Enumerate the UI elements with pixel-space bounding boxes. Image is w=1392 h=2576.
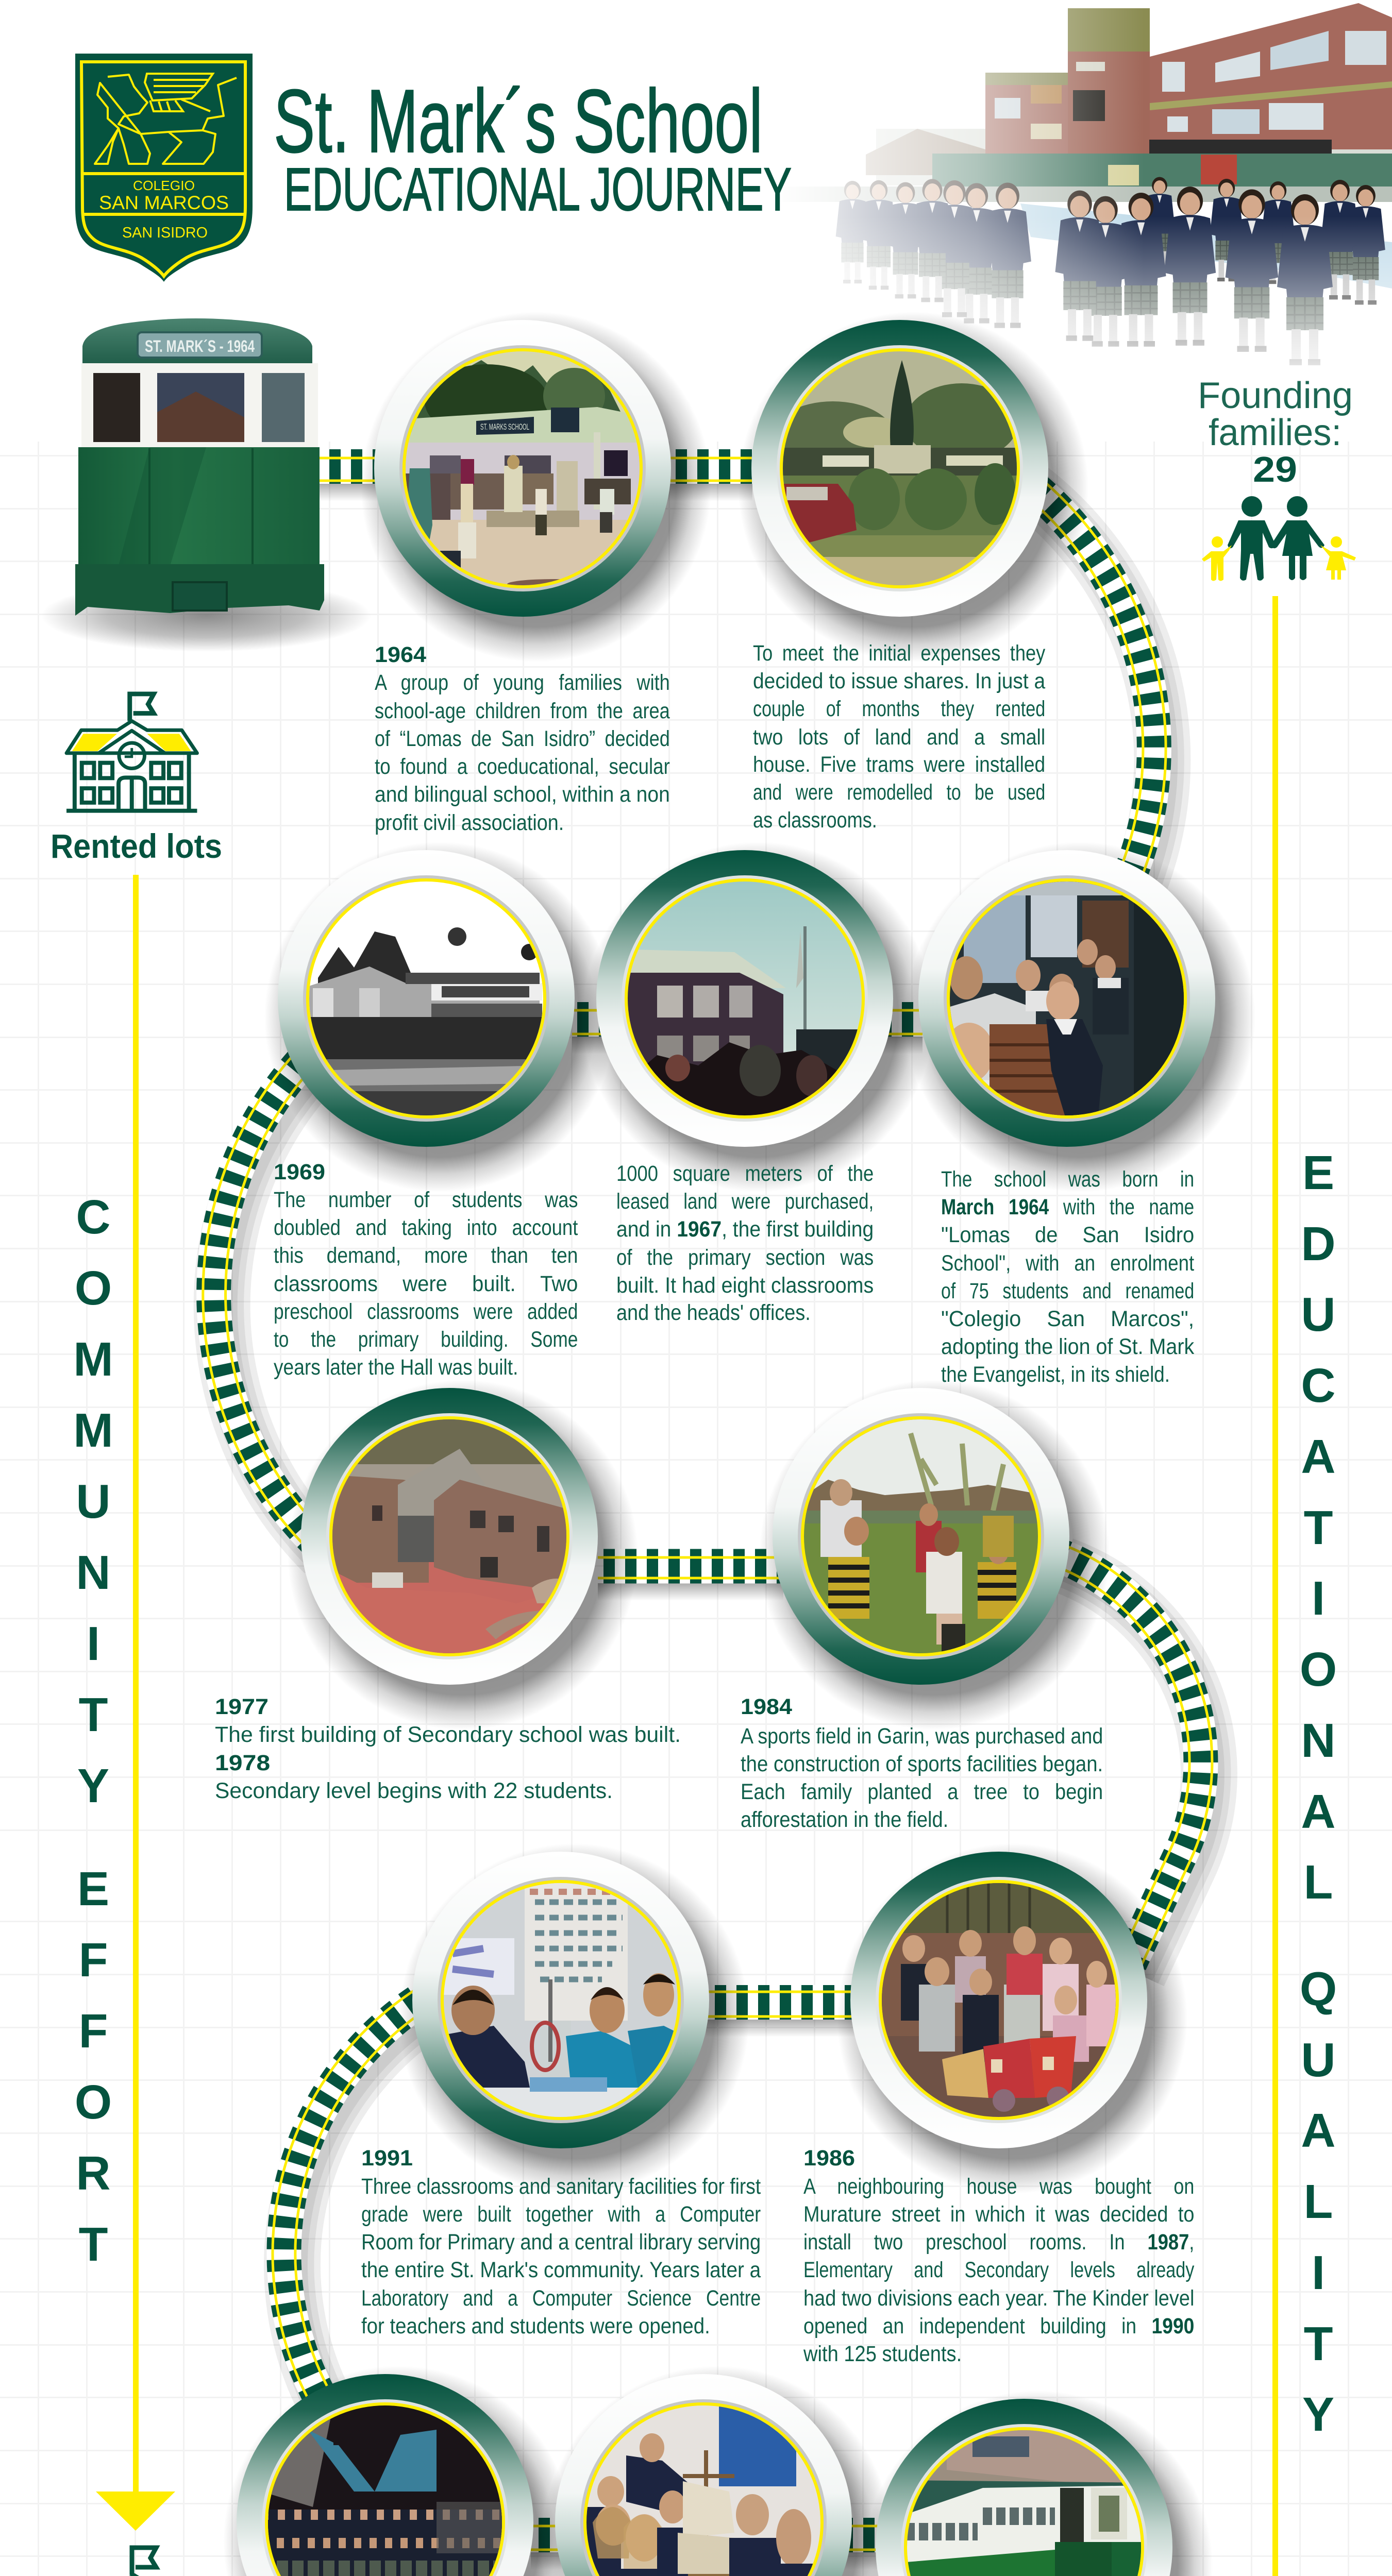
text: 1964: of “Lomas de San Isidro” decided [375, 726, 670, 751]
title: EDUCATIONAL JOURNEY [284, 156, 792, 224]
text: 1984: the construction of sports facilities began. [741, 1752, 1103, 1776]
text: 1969: to the primary building. Some [274, 1327, 578, 1352]
text: 1984 [741, 1694, 1103, 1832]
milestone circle: 1977 [288, 1380, 638, 1730]
vertical heading: community effort: O [75, 1261, 112, 1315]
text: March 1964: of 75 students and renamed [941, 1279, 1194, 1303]
milestone circle: March 1964 [905, 842, 1255, 1192]
text: 1964: and bilingual school, within a non [375, 782, 670, 807]
wing [145, 74, 213, 111]
vertical heading: community effort: T [79, 2217, 108, 2271]
vertical heading: educational quality: U [1301, 1287, 1336, 1341]
vertical heading: community effort: Y [77, 1759, 109, 1812]
text: 1977 and 1978: The first building of Secondary school was built. [215, 1722, 681, 1747]
text: 1991: 1991 [361, 2146, 413, 2171]
milestone circle: rented lots and trams [738, 312, 1088, 662]
logo: San Marcos shield: SAN ISIDRO [122, 225, 208, 241]
vertical heading: educational quality: A [1301, 2104, 1336, 2157]
text: 1969: years later the Hall was built. [274, 1355, 518, 1380]
text: 1984: Each family planted a tree to begin [741, 1780, 1103, 1804]
milestone circle: 1964: ST. MARKS SCHOOL [480, 422, 529, 432]
milestone circle: 1991 [399, 1843, 749, 2194]
text: 1969 [274, 1160, 578, 1380]
text: 1984: A sports field in Garin, was purchased and [741, 1724, 1103, 1749]
railway tracks [0, 442, 1212, 2576]
label: rented lots: Rented lots [51, 827, 222, 865]
vertical heading: educational quality: N [1301, 1714, 1336, 1767]
logo: San Marcos shield: COLEGIO [133, 178, 195, 193]
text: 1969: The number of students was [274, 1188, 578, 1212]
title [274, 71, 792, 224]
vertical heading: educational quality: E [1302, 1146, 1334, 1199]
text: initial expenses: two lots of land and a small [753, 725, 1045, 750]
vertical heading: community effort [73, 1190, 113, 2271]
vertical heading: community effort: T [79, 1688, 108, 1741]
text: initial expenses: as classrooms. [753, 808, 877, 833]
text: 1984: 1984 [741, 1694, 792, 1719]
text: 1969: this demand, more than ten [274, 1243, 578, 1268]
text: 1969: preschool classrooms were added [274, 1299, 578, 1324]
text: 1967: 1000 square meters of the [616, 1161, 874, 1186]
milestone circle: 1997/1998 [223, 2366, 574, 2576]
text: 1964 [375, 642, 670, 835]
text: 1967: and in 1967, the first building [616, 1217, 874, 1242]
text: 1986: 1986 [803, 2146, 855, 2171]
text: 1977 and 1978: 1978 [215, 1751, 270, 1775]
vertical heading: community effort: I [87, 1617, 100, 1670]
text: 1984: afforestation in the field. [741, 1807, 948, 1832]
milestone circle: 1969 [264, 842, 615, 1192]
text: March 1964: "Lomas de San Isidro [941, 1223, 1194, 1247]
text: 1986 [803, 2146, 1195, 2366]
title: St. Mark´s School [274, 71, 763, 171]
vertical heading: community effort: C [76, 1190, 111, 1244]
text: 1967: leased land were purchased, [616, 1189, 874, 1214]
icon: school (own school) [68, 2548, 200, 2576]
lion outline [95, 75, 237, 164]
text: 1986: install two preschool rooms. In 1987, [803, 2230, 1194, 2255]
vertical heading: educational quality: D [1301, 1217, 1336, 1270]
vertical heading: community effort: M [73, 1403, 113, 1457]
text: initial expenses: decided to issue shares. In just a [753, 669, 1046, 693]
text: initial expenses [753, 641, 1046, 833]
text: 1991: grade were built together with a Computer [361, 2202, 761, 2227]
text: 1967: and the heads' offices. [616, 1300, 811, 1325]
text: 1969: classrooms were built. Two [274, 1272, 578, 1296]
text: 1991: Room for Primary and a central library serving [361, 2230, 761, 2255]
text: 1986: A neighbouring house was bought on [803, 2174, 1194, 2199]
vertical heading: community effort: R [76, 2146, 111, 2200]
vertical heading: educational quality [1300, 1146, 1337, 2441]
text: 1977 and 1978: 1977 [215, 1694, 269, 1719]
vertical heading: educational quality: A [1301, 1430, 1336, 1483]
text: initial expenses: To meet the initial expenses they [753, 641, 1046, 666]
vertical heading: educational quality: T [1304, 2317, 1333, 2370]
text: initial expenses: couple of months they rented [753, 697, 1045, 721]
stat: founding families: families: [1209, 412, 1341, 453]
vertical heading: educational quality: T [1304, 1501, 1333, 1554]
text: 1977 and 1978 [215, 1694, 681, 1803]
vertical heading: educational quality: U [1301, 2033, 1336, 2087]
text: March 1964 [941, 1167, 1195, 1387]
track shadows [0, 463, 1209, 2576]
text: 1964: school-age children from the area [375, 699, 670, 723]
text: 1986: opened an independent building in 1990 [803, 2314, 1194, 2338]
text: 1967: built. It had eight classrooms [616, 1273, 874, 1298]
text: 1967 [616, 1161, 874, 1325]
milestone circle: 2003 [542, 2366, 892, 2576]
tram illustration: ST. MARK´S - 1964 [145, 337, 255, 355]
text: 1964: A group of young families with [375, 670, 670, 695]
text: 1991: the entire St. Mark's community. Years later a [361, 2258, 761, 2282]
text: 1991 [361, 2146, 761, 2338]
icon: school (rented lots) [66, 694, 197, 811]
text: 1986: with 125 students. [803, 2342, 962, 2366]
text: 1991: for teachers and students were opened. [361, 2314, 710, 2338]
text: March 1964: "Colegio San Marcos", [941, 1307, 1194, 1331]
vertical heading: educational quality: Q [1300, 1962, 1337, 2015]
stat: founding families [1198, 375, 1353, 489]
vertical heading: educational quality: I [1312, 1571, 1325, 1625]
vertical heading: community effort: E [77, 1862, 109, 1916]
vertical heading: educational quality: C [1301, 1359, 1336, 1412]
arrow: educational quality [1235, 596, 1314, 2576]
vertical heading: community effort: O [75, 2075, 112, 2129]
vertical heading: educational quality: Y [1302, 2387, 1334, 2441]
vertical heading: educational quality: A [1301, 1785, 1336, 1838]
vertical heading: community effort: U [76, 1475, 111, 1528]
text: 1986: had two divisions each year. The Kinder level [803, 2286, 1194, 2311]
vertical heading: community effort: F [79, 2004, 108, 2058]
text: initial expenses: and were remodelled to be used [753, 780, 1045, 805]
tram illustration [41, 318, 371, 652]
vertical heading: educational quality: O [1300, 1642, 1337, 1696]
icon: family [1202, 496, 1356, 581]
milestone circle: 1967 [583, 842, 933, 1192]
text: 1969: 1969 [274, 1160, 325, 1184]
header photo: school building and pupils [773, 0, 1392, 392]
text: 1964: 1964 [375, 642, 426, 667]
vertical heading: educational quality: L [1304, 1855, 1333, 1909]
logo: San Marcos shield [75, 54, 253, 282]
vertical heading: educational quality: L [1304, 2175, 1333, 2228]
stat: founding families: 29 [1253, 449, 1297, 489]
text: 1991: Laboratory and a Computer Science Centre [361, 2286, 761, 2311]
text: March 1964: The school was born in [941, 1167, 1194, 1192]
arrow: community effort [96, 875, 175, 2531]
text: March 1964: the Evangelist, in its shield. [941, 1362, 1170, 1387]
text: 1964: profit civil association. [375, 810, 564, 835]
milestone circle: 1984 [759, 1380, 1110, 1730]
vertical heading: community effort: M [73, 1332, 113, 1386]
vertical heading: community effort: F [79, 1933, 108, 1987]
text: 1977 and 1978: Secondary level begins with 22 students. [215, 1778, 613, 1803]
vertical heading: community effort: N [76, 1546, 111, 1599]
text: 1964: to found a coeducational, secular [375, 754, 670, 779]
logo: San Marcos shield: SAN MARCOS [99, 192, 229, 213]
text: 1969: doubled and taking into account [274, 1215, 578, 1240]
milestone circle: 2010 [862, 2391, 1213, 2576]
milestone circle: 1964 [361, 312, 711, 662]
text: 1991: Three classrooms and sanitary facilities for first [361, 2174, 761, 2199]
text: initial expenses: house. Five trams were installed [753, 752, 1045, 777]
text: March 1964: adopting the lion of St. Mark [941, 1334, 1195, 1359]
text: 1986: Elementary and Secondary levels already [803, 2258, 1195, 2282]
vertical heading: educational quality: I [1312, 2246, 1325, 2299]
text: March 1964: March 1964 with the name [941, 1195, 1194, 1219]
stat: founding families: Founding [1198, 375, 1353, 416]
text: March 1964: School", with an enrolment [941, 1251, 1194, 1276]
text: 1986: Murature street in which it was decided to [803, 2202, 1194, 2227]
text: 1967: of the primary section was [616, 1245, 874, 1270]
milestone circle: 1986 [837, 1843, 1187, 2194]
